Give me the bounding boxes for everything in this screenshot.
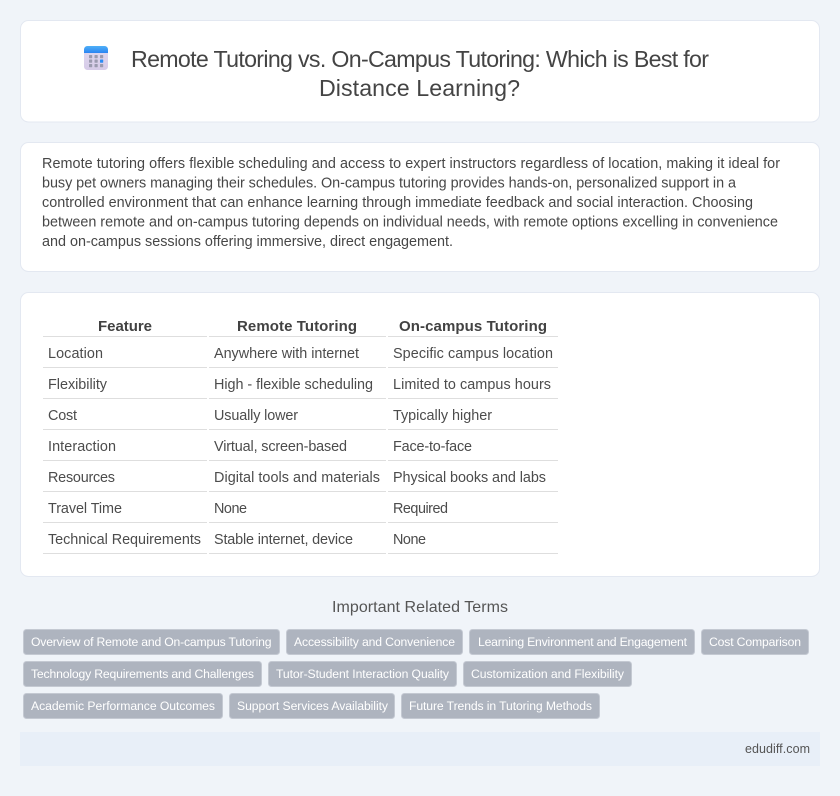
tag: learning environment: [470, 630, 694, 654]
row: resources: [48, 470, 546, 486]
row: travel time: [48, 501, 448, 517]
footer: [20, 732, 820, 766]
title: [131, 46, 709, 101]
row: cost: [48, 408, 492, 424]
row: cost: Cost: [48, 408, 77, 424]
icon: calendar: [84, 46, 108, 70]
row: flexibility: Limited to campus hours: [393, 377, 551, 393]
table header row: [98, 318, 547, 335]
title: Distance Learning?: [319, 75, 520, 101]
row: cost: Typically higher: [393, 408, 492, 424]
row: technical requirements: None: [393, 532, 426, 548]
row: flexibility: High - flexible scheduling: [214, 377, 373, 393]
row: flexibility: [48, 377, 551, 393]
tag: academic performance: [24, 694, 222, 718]
heading: important related terms: Important Related Terms: [332, 599, 508, 616]
tag row 3: [24, 694, 600, 718]
row: resources: Digital tools and materials: [214, 470, 380, 486]
row: location: [48, 346, 553, 362]
row: interaction: Virtual, screen-based: [214, 439, 347, 455]
row: location: Specific campus location: [393, 346, 553, 362]
table rules: [43, 336, 558, 554]
tag row 2: [24, 662, 632, 686]
tag: future trends: [402, 694, 600, 718]
row: interaction: Face-to-face: [393, 439, 472, 455]
row: technical requirements: [48, 532, 426, 548]
row: travel time: Travel Time: [48, 501, 122, 517]
row: technical requirements: Stable internet, device: [214, 532, 353, 548]
tag: customization: [464, 662, 632, 686]
tag: interaction quality: Tutor-Student Interaction Quality: [276, 667, 450, 681]
row: interaction: Interaction: [48, 439, 116, 455]
panel: header: [20, 20, 820, 122]
panel: comparison table: [20, 292, 820, 576]
table header row: Remote Tutoring: [237, 318, 357, 335]
tag row 1: [24, 630, 808, 654]
tag: future trends: Future Trends in Tutoring Methods: [409, 699, 592, 713]
row: travel time: Required: [393, 501, 448, 517]
tag: cost comparison: Cost Comparison: [709, 635, 801, 649]
tag: accessibility: [286, 630, 462, 654]
row: interaction: [48, 439, 472, 455]
summary text block: controlled environment that can enhance learning through immediate feedback and social interaction. Choosing: [42, 195, 753, 211]
row: location: Location: [48, 346, 103, 362]
tag: customization: Customization and Flexibility: [471, 667, 625, 681]
tag: technology requirements: [24, 662, 262, 686]
summary text block: Remote tutoring offers flexible scheduling and access to expert instructors regardless of location, making it ideal for: [42, 156, 780, 172]
tag: interaction quality: [268, 662, 456, 686]
title: Remote Tutoring vs. On-Campus Tutoring: Which is Best for: [131, 46, 709, 72]
summary text block: busy pet owners managing their schedules. On-campus tutoring provides hands-on, personalized support in a: [42, 176, 736, 192]
row: cost: Usually lower: [214, 408, 298, 424]
tag: academic performance: Academic Performance Outcomes: [31, 699, 215, 713]
row: location: Anywhere with internet: [214, 346, 359, 362]
summary text block: [42, 156, 780, 250]
row: resources: Physical books and labs: [393, 470, 546, 486]
footer credit: edudiff.com: [745, 742, 810, 756]
table header row: On-campus Tutoring: [399, 318, 547, 335]
panel: summary: [20, 142, 820, 272]
tag: accessibility: Accessibility and Convenience: [294, 635, 455, 649]
row: travel time: None: [214, 501, 247, 517]
tag: technology requirements: Technology Requirements and Challenges: [31, 667, 254, 681]
table header row: Feature: [98, 318, 152, 335]
summary text block: between remote and on-campus tutoring depends on individual needs, with remote options excelling in convenience: [42, 214, 778, 230]
summary text block: and on-campus sessions offering immersive, direct engagement.: [42, 234, 453, 250]
tag: overview: [24, 630, 280, 654]
row: flexibility: Flexibility: [48, 377, 108, 393]
tag: support services: [230, 694, 394, 718]
tag: cost comparison: [702, 630, 808, 654]
row: resources: Resources: [48, 470, 115, 486]
tag: support services: Support Services Availability: [237, 699, 389, 713]
tag: learning environment: Learning Environment and Engagement: [478, 635, 688, 649]
tag: overview: Overview of Remote and On-campus Tutoring: [31, 635, 272, 649]
row: technical requirements: Technical Requirements: [48, 532, 201, 548]
